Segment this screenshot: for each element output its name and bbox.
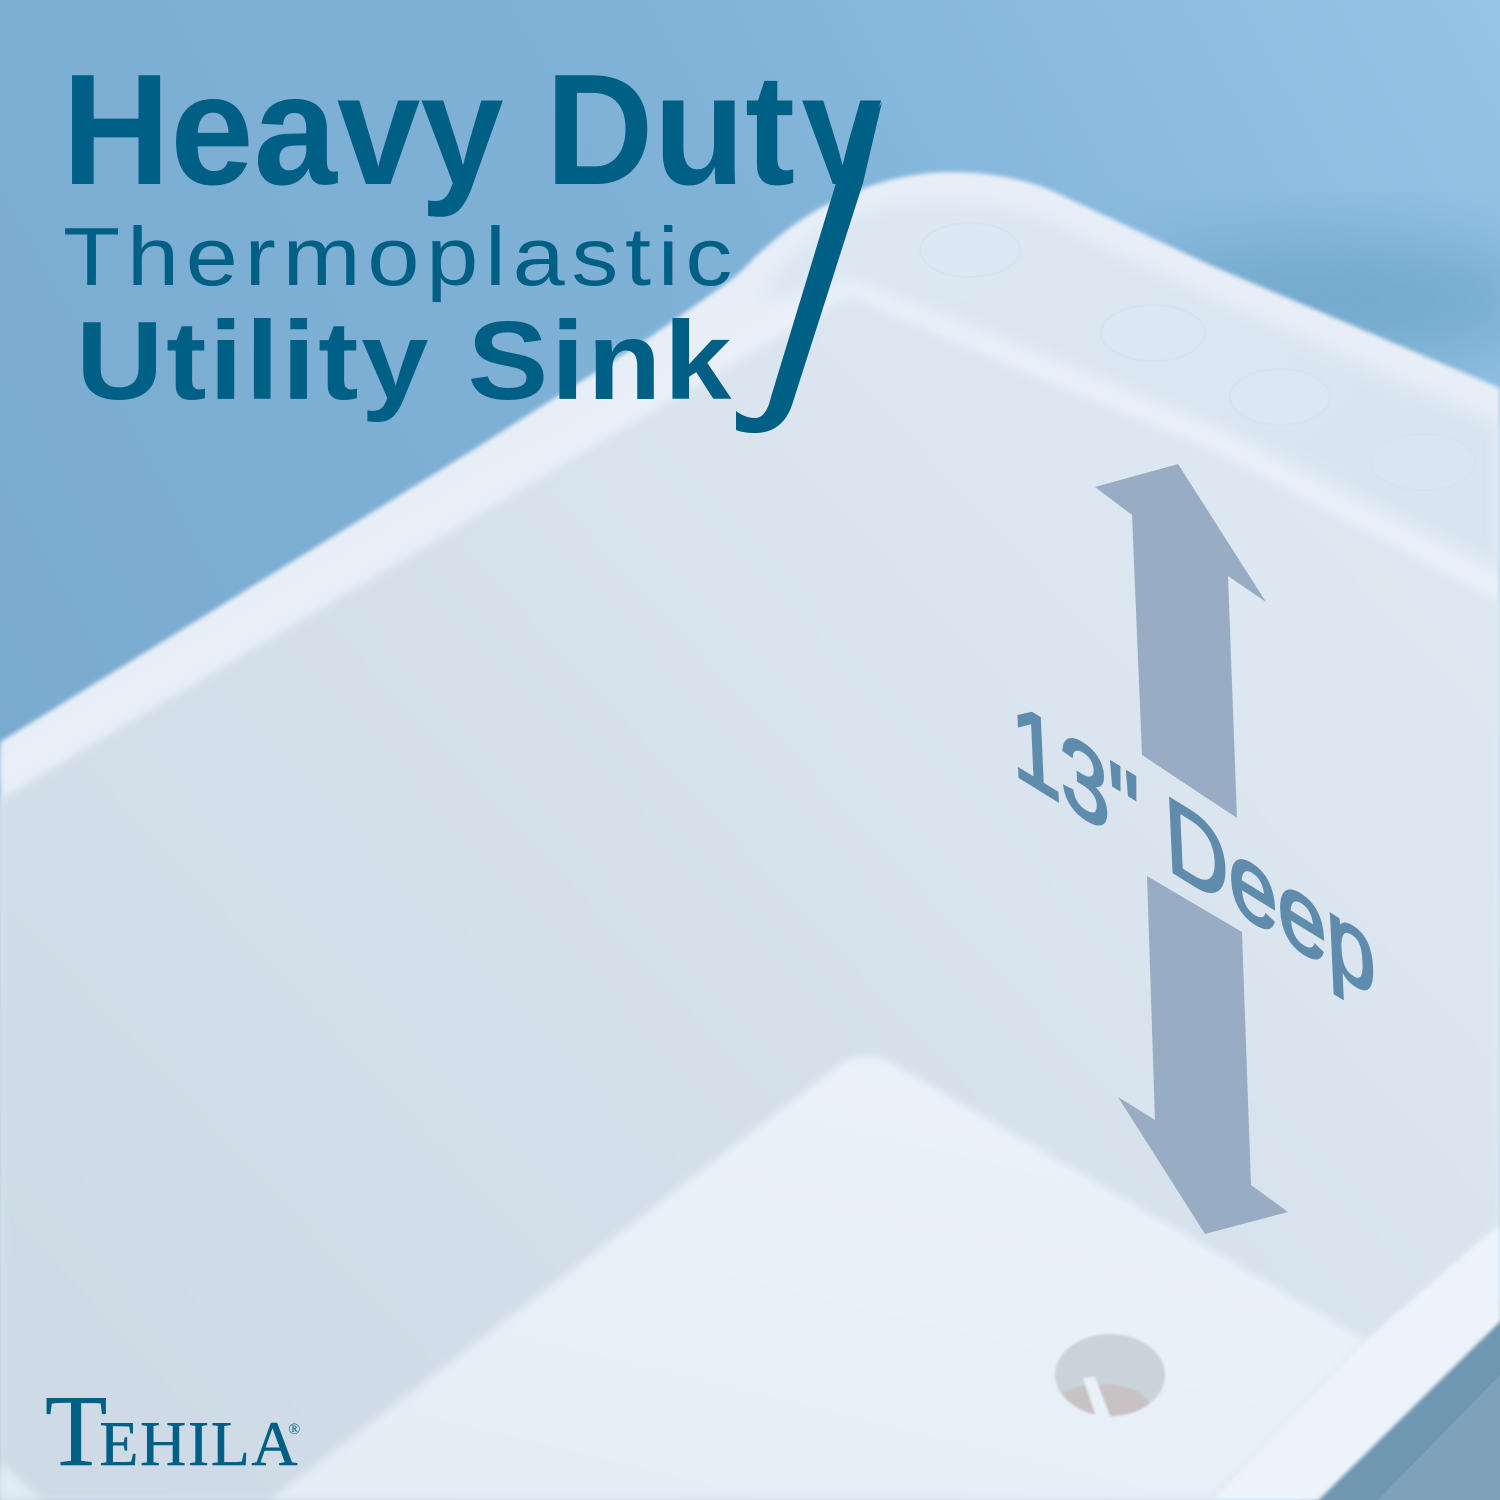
floor shadow behind sink, lower right corner <box>1300 1300 1500 1500</box>
depth arrow: upper half <box>1095 464 1266 818</box>
sink basin lower left wedge <box>0 1462 42 1500</box>
title line: Thermoplastic: Thermoplastic <box>63 210 739 303</box>
title line: Heavy Duty <box>62 42 882 433</box>
title line: Utility Sink: Utility Sink <box>76 299 734 423</box>
title line: Heavy Duty: y <box>801 42 882 218</box>
title <box>62 42 882 433</box>
sink right rim band <box>1213 1225 1500 1500</box>
depth label: 13" Deep <box>1009 676 1378 1021</box>
brand logo: Tehila: ® <box>288 1421 300 1438</box>
drain hole <box>1055 1334 1165 1416</box>
sink rim flat ledge with suction marks <box>760 203 1500 570</box>
title line: Heavy Duty: Heavy Dut <box>62 42 795 218</box>
depth arrow: lower half <box>1118 876 1288 1234</box>
sink basin floor <box>270 1056 1367 1500</box>
brand logo: Tehila: TEHILA <box>45 1375 299 1488</box>
